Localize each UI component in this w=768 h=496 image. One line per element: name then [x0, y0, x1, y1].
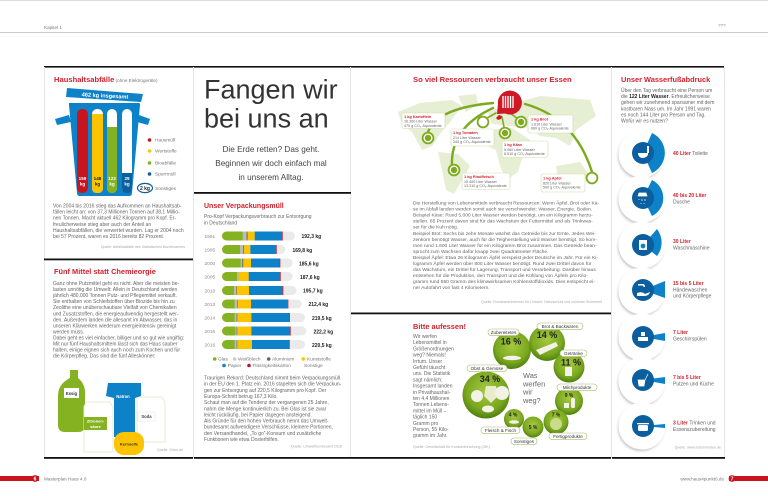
source: Quelle: Gesellschaft für Konsumforschung (GfK) [413, 445, 490, 449]
icon: waste bin chart: 462 kg insgesamt [82, 92, 129, 101]
callout: Brot: 660 g CO₂-Äquivalente [531, 127, 569, 131]
illustration: five household products: Zitronen- [87, 418, 105, 424]
text block: Funktionen wie etwa Dosierhilfen. [204, 437, 279, 443]
heading: Haushaltsabfälle (ohne Elektrogeräte) [54, 75, 158, 84]
icon: waste bin chart: kg [95, 182, 100, 186]
text block: die [621, 94, 629, 100]
legend: Sonstiges [155, 186, 177, 192]
item: Putzen und Küche [632, 369, 714, 391]
stacked bar chart: 169,8 kg [292, 248, 312, 254]
main title: bei uns an [204, 104, 329, 134]
bubble chart: 5 % [529, 425, 538, 431]
legend: Flüssigkeitskarton [252, 363, 291, 369]
stacked bar chart: 2000 [204, 261, 216, 267]
text block: Sie enthalten von Schleifstoffen über Biozide bis hin zu [53, 299, 175, 305]
icon: waste bin chart: kg [124, 182, 130, 186]
callout: Rindfleisch: 15.400 Liter Wasser [464, 180, 498, 184]
icon: waste bin chart: 29 [124, 176, 130, 181]
text block: entstehen für die Produktion, den Transport und die Kühlung von Äpfeln pro Kilo- [413, 272, 588, 279]
text block: das Wachstum, ein Drittel für Lagerung, Transport und Verarbeitung. Darüber hinaus [413, 267, 596, 273]
text block: sprucht zum Wachsen dafür knapp zwei Quadratmeter Fläche. [413, 249, 548, 255]
stacked bar chart: 2005 [204, 275, 216, 281]
stacked bar chart: 212,4 kg [308, 302, 328, 308]
chart question: wir [522, 388, 533, 397]
legend: Papier [228, 363, 242, 369]
bubble chart: Getränke [564, 351, 583, 356]
item: Geschirrspülen: 7 Liter [673, 330, 688, 336]
source: Quelle: Oeko.de [157, 448, 183, 452]
text block: Irrtum. Unser [413, 359, 443, 365]
item: Dusche: 40 bis 20 Liter [673, 193, 706, 199]
item: Toilette [632, 133, 708, 173]
item: Putzen und Küche: Putzen und Küche [673, 382, 714, 388]
text block: gehen wir zunehmend sparsamer mit dem [621, 100, 714, 106]
stacked bar chart: 2010 [204, 288, 216, 294]
text block: stellen. 85 Prozent davon sind für das Wachstum der Futtermittel und als Trinkwas- [413, 219, 593, 225]
text block: sagt nämlich: [413, 377, 442, 383]
stacked bar chart: 195,7 kg [303, 289, 323, 295]
text block: nahm die Menge kontinuierlich zu. Bei Glas ist sie zwar [204, 406, 327, 412]
text block: Ganz ohne Putzmittel geht es nicht. Aber die meisten be- [53, 281, 180, 287]
stacked bar chart: 2015 [204, 329, 216, 335]
item: Waschmaschine [632, 229, 710, 256]
item: Trinken und Essenszubereitung: 3 Liter Trinken und [673, 420, 716, 426]
text block: in Privathaushal- [413, 390, 451, 396]
bubble chart [462, 323, 597, 445]
2000 [222, 258, 293, 268]
text block: den. Außerdem landen die allesamt im Abwasser, das in [53, 317, 177, 323]
bubble chart: Fleisch & Fisch [485, 428, 517, 433]
text block: Beispiel Äpfel: Etwa 26 Kilogramm Äpfel verspeist jeder Deutsche im Jahr. Für ein Ki- [413, 254, 598, 261]
icon: waste bin chart [55, 88, 150, 196]
text block: logramm Äpfel werden über 800 Liter Wasser benötigt. Rund zwei Drittel davon für [413, 260, 592, 267]
stacked bar chart: 192,3 kg [302, 234, 321, 240]
text block: Beispiel Käse: Rund 5.000 Liter Wasser werden benötigt, um ein Kilogramm herzu- [413, 213, 593, 219]
text block: unseren Klärwerken wiederum energieintensiv gereinigt [53, 323, 177, 329]
running head: marker: ??? [718, 23, 726, 28]
callout: Käse: 5.060 Liter Wasser [504, 148, 536, 152]
text block: Als Gründe für den hohen Verbrauch nennt das Umwelt- [204, 419, 329, 425]
text block: se im Abfall landen werden somit auch sie verschwendet: Wasser, Energie, Boden. [413, 207, 592, 213]
text block: Beispiel Brot: Sechs bis zehn Monate wächst das Getreide bis zur Ernte. Jedes Wei- [413, 231, 596, 237]
text block: Traurigen Rekord: Deutschland nimmt beim Verpackungsmüll [204, 376, 340, 382]
item: Händewaschen [632, 279, 712, 301]
intro text: in unserem Alltag. [238, 173, 304, 182]
text block: Europa-Schnitt betrug 167,3 Kilo. [204, 394, 278, 400]
text block: Wir werfen [413, 334, 437, 340]
text block: Die Herstellung von Lebensmitteln verbraucht Ressourcen: Wenn Äpfel, Brot oder Kä- [413, 200, 599, 206]
footer: left label: Masterplan Haus 4.0 [44, 476, 87, 481]
text block: werden muss. [53, 329, 84, 335]
legend: Aluminium [272, 357, 294, 363]
stacked bar chart [204, 232, 333, 349]
text block: leicht rückläufig, bei Papier dagegen ansteigend. [204, 412, 312, 418]
item: Dusche: Dusche [673, 200, 690, 206]
chain of soft discs [618, 130, 666, 451]
icon: waste bin chart: 159 [79, 176, 87, 181]
intro text: Die Erde retten? Das geht. [223, 145, 319, 154]
legend: Glas [218, 357, 228, 363]
text block: Größenordnungen [413, 346, 454, 352]
callout: Rindfleisch [462, 173, 510, 190]
text block: und Zusatzstoffen, die energieaufwendig hergestellt wer- [53, 311, 179, 317]
callout: Apfel: 1 kg Apfel [543, 176, 561, 180]
text block: Gefühl täuscht [413, 365, 446, 371]
text block: men rund 1.600 Liter Wasser für ein Kilogramm Brot zusammen. Das Getreide bean- [413, 243, 597, 249]
item: Waschmaschine: Waschmaschine [673, 246, 710, 252]
legend: Kunststoffe [307, 357, 331, 363]
2016 [222, 340, 305, 349]
stacked bar chart: 185,6 kg [299, 261, 319, 267]
text block: nen Tonnen. Macht aktuell 462 Kilogramm pro Kopf. Er- [53, 216, 176, 222]
item: Dusche [632, 180, 706, 216]
callout: Kartoffeln: 1 kg Kartoffeln [404, 114, 432, 119]
text block: gramm im Jahr. [413, 433, 447, 439]
running head: chapter: Kapitel 1 [44, 25, 62, 30]
chart question: Was [523, 371, 538, 380]
text block: mittel im Müll – [413, 408, 447, 414]
legend: Bioabfälle [155, 161, 176, 167]
footer: right page number: 7 [731, 476, 734, 482]
text block: gen zur Entsorgung auf 220,5 Kilogramm pro Kopf. Der [204, 388, 327, 394]
callout: Kartoffeln: 16.300 Liter Wasser [404, 119, 438, 123]
illustration: five household products: säure [90, 424, 102, 429]
text block: zenkorn benötigt Wasser, auch für die Teigherstellung wird Wasser benötigt. So kom- [413, 237, 597, 243]
text block: gramm rund 550 Gramm des klimawirksamen Kohlenstoffdioxids. Dies entspricht ei- [413, 279, 595, 285]
callout: Apfel: 820 Liter Wasser [543, 181, 572, 185]
callout: Kartoffeln [402, 113, 445, 128]
text block: Wofür wir es nutzen? [621, 118, 668, 124]
bubble chart: Brot & Backwaren [542, 324, 579, 329]
2014 [222, 313, 305, 322]
legend: Hausmüll [155, 138, 175, 144]
callout: Tomaten: 214 Liter Wasser [453, 136, 482, 140]
text block: kostbaren Nass um. Im Jahr 1991 waren [621, 106, 711, 112]
text block: die Körperpfleg. Das sind die fünf Alleskönner: [53, 354, 156, 360]
text block: täglich 150 [413, 415, 437, 421]
icons: food circles [423, 117, 597, 183]
icon: waste bin chart: kg [80, 182, 85, 186]
text block: Über den Tag verbraucht eine Person um [621, 87, 712, 94]
2015 [222, 326, 306, 336]
callout: Brot [528, 115, 573, 133]
callout: Käse: 1 kg Käse [504, 142, 523, 147]
legend [213, 357, 331, 369]
footer: right label: www.haus4punkt0.de [680, 476, 724, 481]
item: Geschirrspülen [632, 326, 707, 348]
icon: red location pin [496, 91, 522, 120]
text block: fällen leicht an: von 37,3 Millionen Tonnen auf 38,1 Millio- [53, 210, 180, 216]
panel: Unser Wasserfußabdruck [618, 75, 721, 451]
1991 [222, 232, 295, 240]
bubble chart: Fertigprodukte [553, 434, 583, 439]
panel: So viel Ressourcen [398, 75, 602, 304]
icon: waste bin chart: 148 [94, 176, 102, 181]
heading: Unser Wasserfußabdruck [621, 75, 711, 84]
item: Händewaschen: Händewaschen [673, 288, 708, 294]
item: Putzen und Küche: 7 bis 5 Liter [673, 375, 701, 381]
source: Quelle: Umweltbundesamt 2018 [291, 444, 342, 448]
text block: Haushaltsabfällen, die verwertet wurden. Lag er 2004 noch [53, 228, 184, 234]
text block: Schaut man auf die Tendenz der vergangenen 25 Jahre, [204, 400, 329, 406]
callout: Käse [502, 141, 548, 158]
source: Quelle: Abfallstatistik des Statistischen Bundesamtes [101, 245, 185, 249]
legend: Sonstige [304, 363, 323, 369]
item: Händewaschen: und Körperpflege [673, 294, 712, 300]
text block: bei 57 Prozent, waren es 2016 bereits 82 Prozent. [53, 234, 164, 240]
bubble chart: 34 % [480, 374, 500, 384]
panel: Fünf Mittel statt Chemieorgie [52, 267, 184, 455]
item: Waschmaschine: 30 Liter [673, 239, 691, 245]
main title: Fangen wir [204, 74, 338, 104]
text block: halten, einige eignen sich auch noch zum Kochen und für [53, 348, 180, 354]
illustration: five household products: Kernseife [120, 442, 139, 446]
callout: Apfel: 500 g CO₂-Äquivalente [543, 186, 581, 190]
callout: Tomaten: 340 g CO₂-Äquivalente [453, 140, 491, 144]
item: Geschirrspülen: Geschirrspülen [673, 336, 707, 342]
callout: Kartoffeln: 470 g CO₂-Äquivalente [404, 124, 442, 128]
stacked bar chart: 220,5 kg [312, 343, 332, 349]
stacked bar chart: 222,2 kg [314, 329, 333, 335]
icon: waste bin chart: kg [109, 182, 115, 186]
panel: Haushaltsabfälle [53, 75, 185, 249]
illustration: five household products [58, 370, 165, 455]
2010 [222, 286, 297, 295]
callout: Brot: 1.610 Liter Wasser [531, 122, 563, 126]
stacked bar chart: 1991 [204, 234, 216, 240]
stacked bar chart: 1995 [204, 248, 216, 254]
item: Trinken und Essenszubereitung [632, 415, 716, 437]
text block: es noch 144 Liter pro Person und Tag. [621, 112, 706, 118]
heading: Fünf Mittel statt Chemieorgie [54, 267, 156, 276]
item: Toilette: 40 Liter Toilette [673, 151, 708, 157]
stacked bar chart: 2016 [204, 343, 216, 349]
bubble chart: 11 % [561, 358, 581, 368]
text block: lasten unnötig die Umwelt: Allein in Deutschland werden [53, 287, 177, 293]
bubble chart: 9 % [565, 393, 574, 399]
callout: Tomaten: 1 kg Tomaten [453, 130, 478, 135]
callout: Apfel [541, 174, 585, 192]
bubble chart: Obst & Gemüse [471, 366, 504, 371]
heading: So viel Ressourcen verbraucht unser Essen [413, 75, 572, 84]
text block: weg? Niemals! [413, 353, 446, 359]
text block: ner Autofahrt von fast 4 Kilometern. [413, 285, 490, 291]
bubble chart: Zubereitetes [491, 330, 517, 335]
text block: Gramm pro [413, 421, 438, 427]
bubble chart: 4 % [509, 412, 518, 418]
text block: jährlich 480.000 Tonnen Putz- und Pflegemittel verkauft. [52, 293, 177, 299]
illustration: five household products: Soda [141, 414, 152, 419]
panel: Unser Verpackungsmüll [204, 203, 342, 448]
item: Trinken und Essenszubereitung: Essenszubereitung [673, 427, 716, 433]
text block: Mit nur fünf Haushaltsmitteln lässt sich das Haus sauber [53, 342, 178, 348]
text block: Dabei geht es viel einfacher, billiger und so gut wie ungiftig: [53, 335, 184, 341]
bubble chart: Sonstiges [514, 439, 535, 444]
text block: Insgesamt landen [413, 384, 453, 390]
text block: Zeolithe eine unüberschaubare Vielfalt von Chemikalien [53, 305, 177, 311]
text block: bundesamt aufwendigere Verschlüsse, kleinere Portionen, [204, 425, 333, 431]
text block: in der EU den 1. Platz ein. 2016 stapelten sich die Verpackun- [204, 382, 342, 388]
footer: left page number: 6 [34, 476, 37, 482]
callout: Rindfleisch: 1 kg Rindfleisch [464, 174, 494, 179]
callout: Brot: 1 kg Brot [531, 116, 549, 122]
text block: Lebensmittel in [413, 340, 447, 346]
text block: ten 4,4 Millionen [413, 396, 450, 402]
chart question: werfen [522, 379, 545, 388]
callout: Rindfleisch: 13.310 g CO₂-Äquivalente [464, 184, 507, 188]
legend: Sperrmüll [155, 172, 176, 178]
bubble chart: 14 % [537, 330, 557, 340]
arrows [428, 103, 592, 172]
2013 [222, 300, 302, 308]
bubble chart: 7 % [552, 412, 561, 418]
text block: 122 Liter Wasser. Erfreulicherweise [629, 94, 710, 100]
source: Quelle: Bundesministerium für Umwelt, Naturschutz und nukleare Sicherheit [481, 300, 602, 304]
item: Händewaschen: 15 bis 5 Liter [673, 281, 704, 287]
text block: ser für die Kuh nötig. [413, 225, 458, 231]
heading: Bitte aufessen! [413, 322, 466, 331]
stacked bar chart: 219,5 kg [312, 316, 332, 322]
stacked bar chart: 187,6 kg [300, 275, 320, 281]
illustration: five household products: Essig [66, 391, 78, 396]
text block: Von 2004 bis 2016 stieg das Aufkommen an Haushaltsab- [53, 204, 182, 210]
text block: freulicherweise stieg aber auch der Anteil an [53, 222, 151, 228]
text block: uns. Die Statistik [413, 371, 451, 377]
source: Quelle: www.bdzeinheiten.de [675, 446, 721, 450]
bubble chart: Milchprodukte [563, 385, 592, 390]
heading: Unser Verpackungsmüll [204, 203, 284, 210]
world map [398, 94, 596, 194]
icon: waste bin chart: 123 [108, 176, 116, 181]
legend [138, 138, 177, 193]
panel: Bitte aufessen [413, 322, 597, 449]
bubble chart: 16 % [501, 336, 521, 346]
stacked bar chart: 2014 [204, 316, 216, 322]
stacked bar chart: 2013 [204, 302, 216, 308]
callout: Tomaten [451, 129, 494, 146]
subheading: in Deutschland [204, 220, 237, 226]
text block: Tonnen Lebens- [413, 402, 449, 408]
callout: Käse: 8.510 g CO₂-Äquivalente [504, 152, 545, 156]
text block: Person, 55 Kilo- [413, 427, 449, 433]
legend: Wertstoffe [155, 149, 177, 155]
subheading: Pro-Kopf Verpackungsverbrauch zur Entsorgung [204, 214, 312, 220]
illustration: five household products: Natron [116, 394, 130, 399]
legend: Weißblech [238, 357, 261, 363]
chart question: weg? [522, 396, 541, 405]
footer: left page number [0, 475, 39, 482]
1995 [222, 245, 285, 254]
footer: right page number [729, 475, 768, 482]
intro text: Beginnen wir doch einfach mal [215, 159, 327, 168]
legend: 2 kg [140, 186, 150, 192]
2005 [222, 272, 293, 281]
text block: den Versandhandel, „To go“-Konsum und zusätzliche [204, 431, 322, 437]
